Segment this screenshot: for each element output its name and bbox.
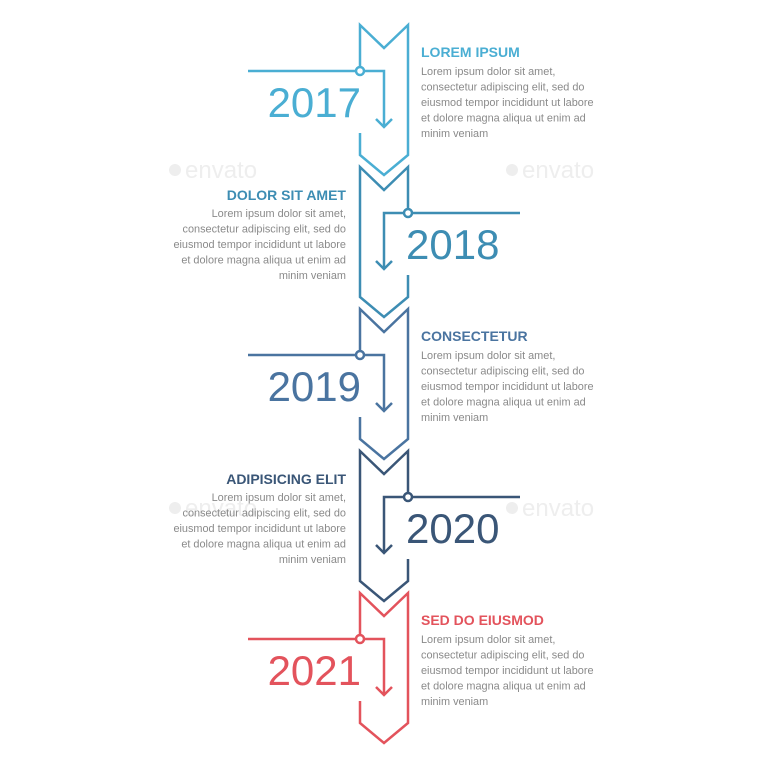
connector arrow 2017 [248,67,392,127]
text block 2021: et dolore magna aliqua ut enim ad [421,680,586,692]
chevron 2020 [360,451,408,601]
year 2020: 2020 [406,505,499,552]
text block 2017: consectetur adipiscing elit, sed do [421,82,584,94]
text block 2020: minim veniam [279,554,346,566]
text: envato [185,157,257,184]
year 2017: 2017 [268,79,361,126]
text block 2019: minim veniam [421,412,488,424]
step 2019 [248,309,594,459]
connector arrow 2019 [248,351,392,411]
chevron 2018 [360,167,408,317]
text block 2021: minim veniam [421,696,488,708]
text block 2019: et dolore magna aliqua ut enim ad [421,396,586,408]
text block 2020: Lorem ipsum dolor sit amet, [212,492,346,504]
step 2017 [248,25,594,175]
text block 2017: Lorem ipsum dolor sit amet, [421,66,555,78]
text: envato [522,157,594,184]
text: envato [522,495,594,522]
text block 2020 [173,471,346,566]
connector arrow 2021 [248,635,392,695]
text block 2021: Lorem ipsum dolor sit amet, [421,634,555,646]
year 2021: 2021 [268,647,361,694]
text block 2018: et dolore magna aliqua ut enim ad [181,254,346,266]
text block 2020: consectetur adipiscing elit, sed do [183,508,346,520]
connector arrow 2018 [376,209,520,269]
text block 2018: minim veniam [279,270,346,282]
text block 2018 [173,187,346,282]
year 2019: 2019 [268,363,361,410]
text block 2021: consectetur adipiscing elit, sed do [421,650,584,662]
text block 2017 [421,44,594,140]
text block 2021 [421,612,594,708]
text block 2018: consectetur adipiscing elit, sed do [183,224,346,236]
step 2021 [248,593,594,743]
text block 2019: Lorem ipsum dolor sit amet, [421,350,555,362]
text block 2018: DOLOR SIT AMET [227,187,346,203]
chevron 2019 [360,309,408,459]
year 2018: 2018 [406,221,499,268]
text block 2019: consectetur adipiscing elit, sed do [421,366,584,378]
text block 2017: LOREM IPSUM [421,44,520,60]
step 2018 [173,167,520,317]
text block 2018: Lorem ipsum dolor sit amet, [212,208,346,220]
text block 2020: ADIPISICING ELIT [226,471,346,487]
text block 2021: eiusmod tempor incididunt ut labore [421,665,594,677]
text block 2021: SED DO EIUSMOD [421,612,544,628]
step 2020 [173,451,520,601]
text block 2017: minim veniam [421,128,488,140]
text block 2020: eiusmod tempor incididunt ut labore [173,523,346,535]
chevron 2021 [360,593,408,743]
text block 2019: CONSECTETUR [421,328,528,344]
text block 2017: eiusmod tempor incididunt ut labore [421,97,594,109]
chevron 2017 [360,25,408,175]
text: envato [185,495,257,522]
connector arrow 2020 [376,493,520,553]
text block 2017: et dolore magna aliqua ut enim ad [421,112,586,124]
text block 2019 [421,328,594,424]
text block 2020: et dolore magna aliqua ut enim ad [181,538,346,550]
text block 2018: eiusmod tempor incididunt ut labore [173,239,346,251]
text block 2019: eiusmod tempor incididunt ut labore [421,381,594,393]
